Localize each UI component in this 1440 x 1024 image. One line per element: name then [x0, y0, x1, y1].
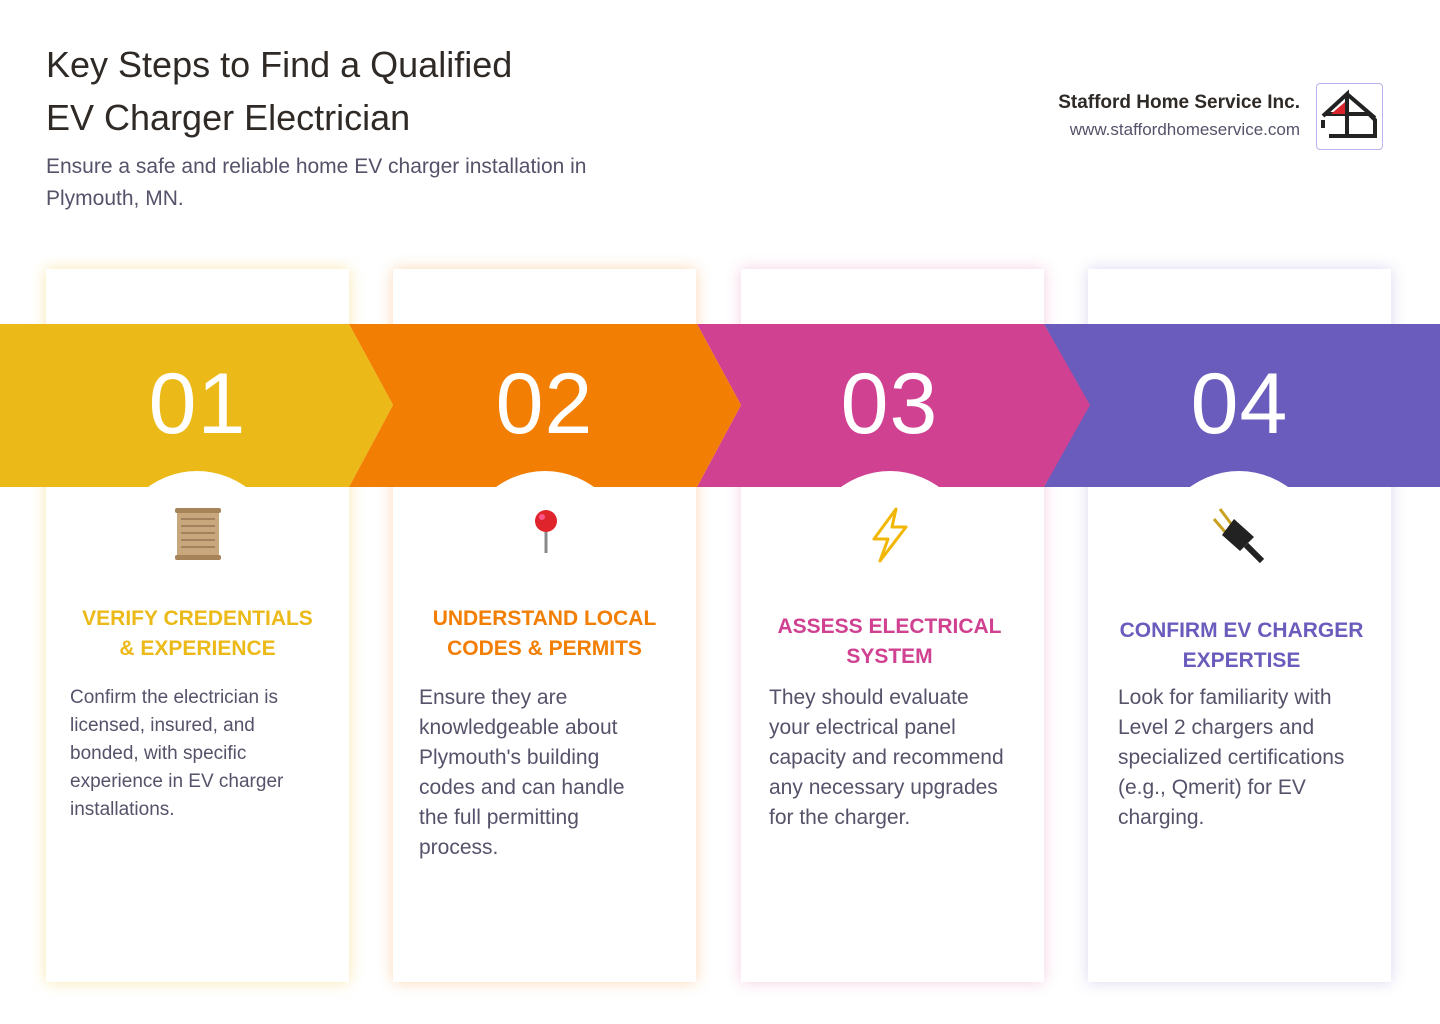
number 03: 03 [841, 356, 938, 452]
card 3 [741, 269, 1044, 982]
step 1 title: VERIFY CREDENTIALS [82, 607, 313, 630]
brand text [1058, 92, 1300, 139]
number 02: 02 [496, 356, 593, 452]
step 3 title: SYSTEM [846, 645, 933, 668]
step 3 title [777, 615, 1002, 668]
step 4 title [1120, 619, 1363, 672]
icon: plug [1212, 508, 1264, 564]
brand text: www.staffordhomeservice.com [1070, 120, 1300, 139]
step 1 title [82, 607, 313, 660]
step 4 text: Look for familiarity with Level 2 chargers and specialized certifications (e.g., Qmerit) for EV charging. [1118, 686, 1344, 829]
step 4 title: CONFIRM EV CHARGER [1120, 619, 1363, 642]
step 2 title [433, 607, 656, 660]
step 3 text: They should evaluate your electrical panel capacity and recommend any necessary upgrades for the charger. [769, 686, 1004, 829]
card 4 [1088, 269, 1391, 982]
arrow band [0, 324, 1440, 487]
icon: pin [535, 510, 557, 553]
step 4 title: EXPERTISE [1183, 649, 1300, 672]
logo [1316, 83, 1383, 150]
brand text: Stafford Home Service Inc. [1058, 92, 1300, 113]
icon: lightning [872, 508, 908, 562]
icon: scroll [175, 508, 221, 560]
step 2 title: CODES & PERMITS [447, 637, 642, 660]
subtitle: Plymouth, MN. [46, 187, 184, 210]
step 2 text: Ensure they are knowledgeable about Plymouth's building codes and can handle the full permitting process. [419, 686, 624, 859]
step 1 text: Confirm the electrician is licensed, insured, and bonded, with specific experience in EV charger installations. [70, 687, 283, 820]
number 01: 01 [149, 356, 246, 452]
title: Key Steps to Find a Qualified [46, 44, 512, 85]
step 1 title: & EXPERIENCE [119, 637, 276, 660]
subtitle [46, 155, 586, 210]
card 2 [393, 269, 696, 982]
subtitle: Ensure a safe and reliable home EV charger installation in [46, 155, 586, 178]
number 04: 04 [1191, 356, 1288, 452]
step 2 title: UNDERSTAND LOCAL [433, 607, 656, 630]
step 3 title: ASSESS ELECTRICAL [777, 615, 1002, 638]
title [46, 44, 512, 138]
title: EV Charger Electrician [46, 97, 410, 138]
card 1 [46, 269, 349, 982]
